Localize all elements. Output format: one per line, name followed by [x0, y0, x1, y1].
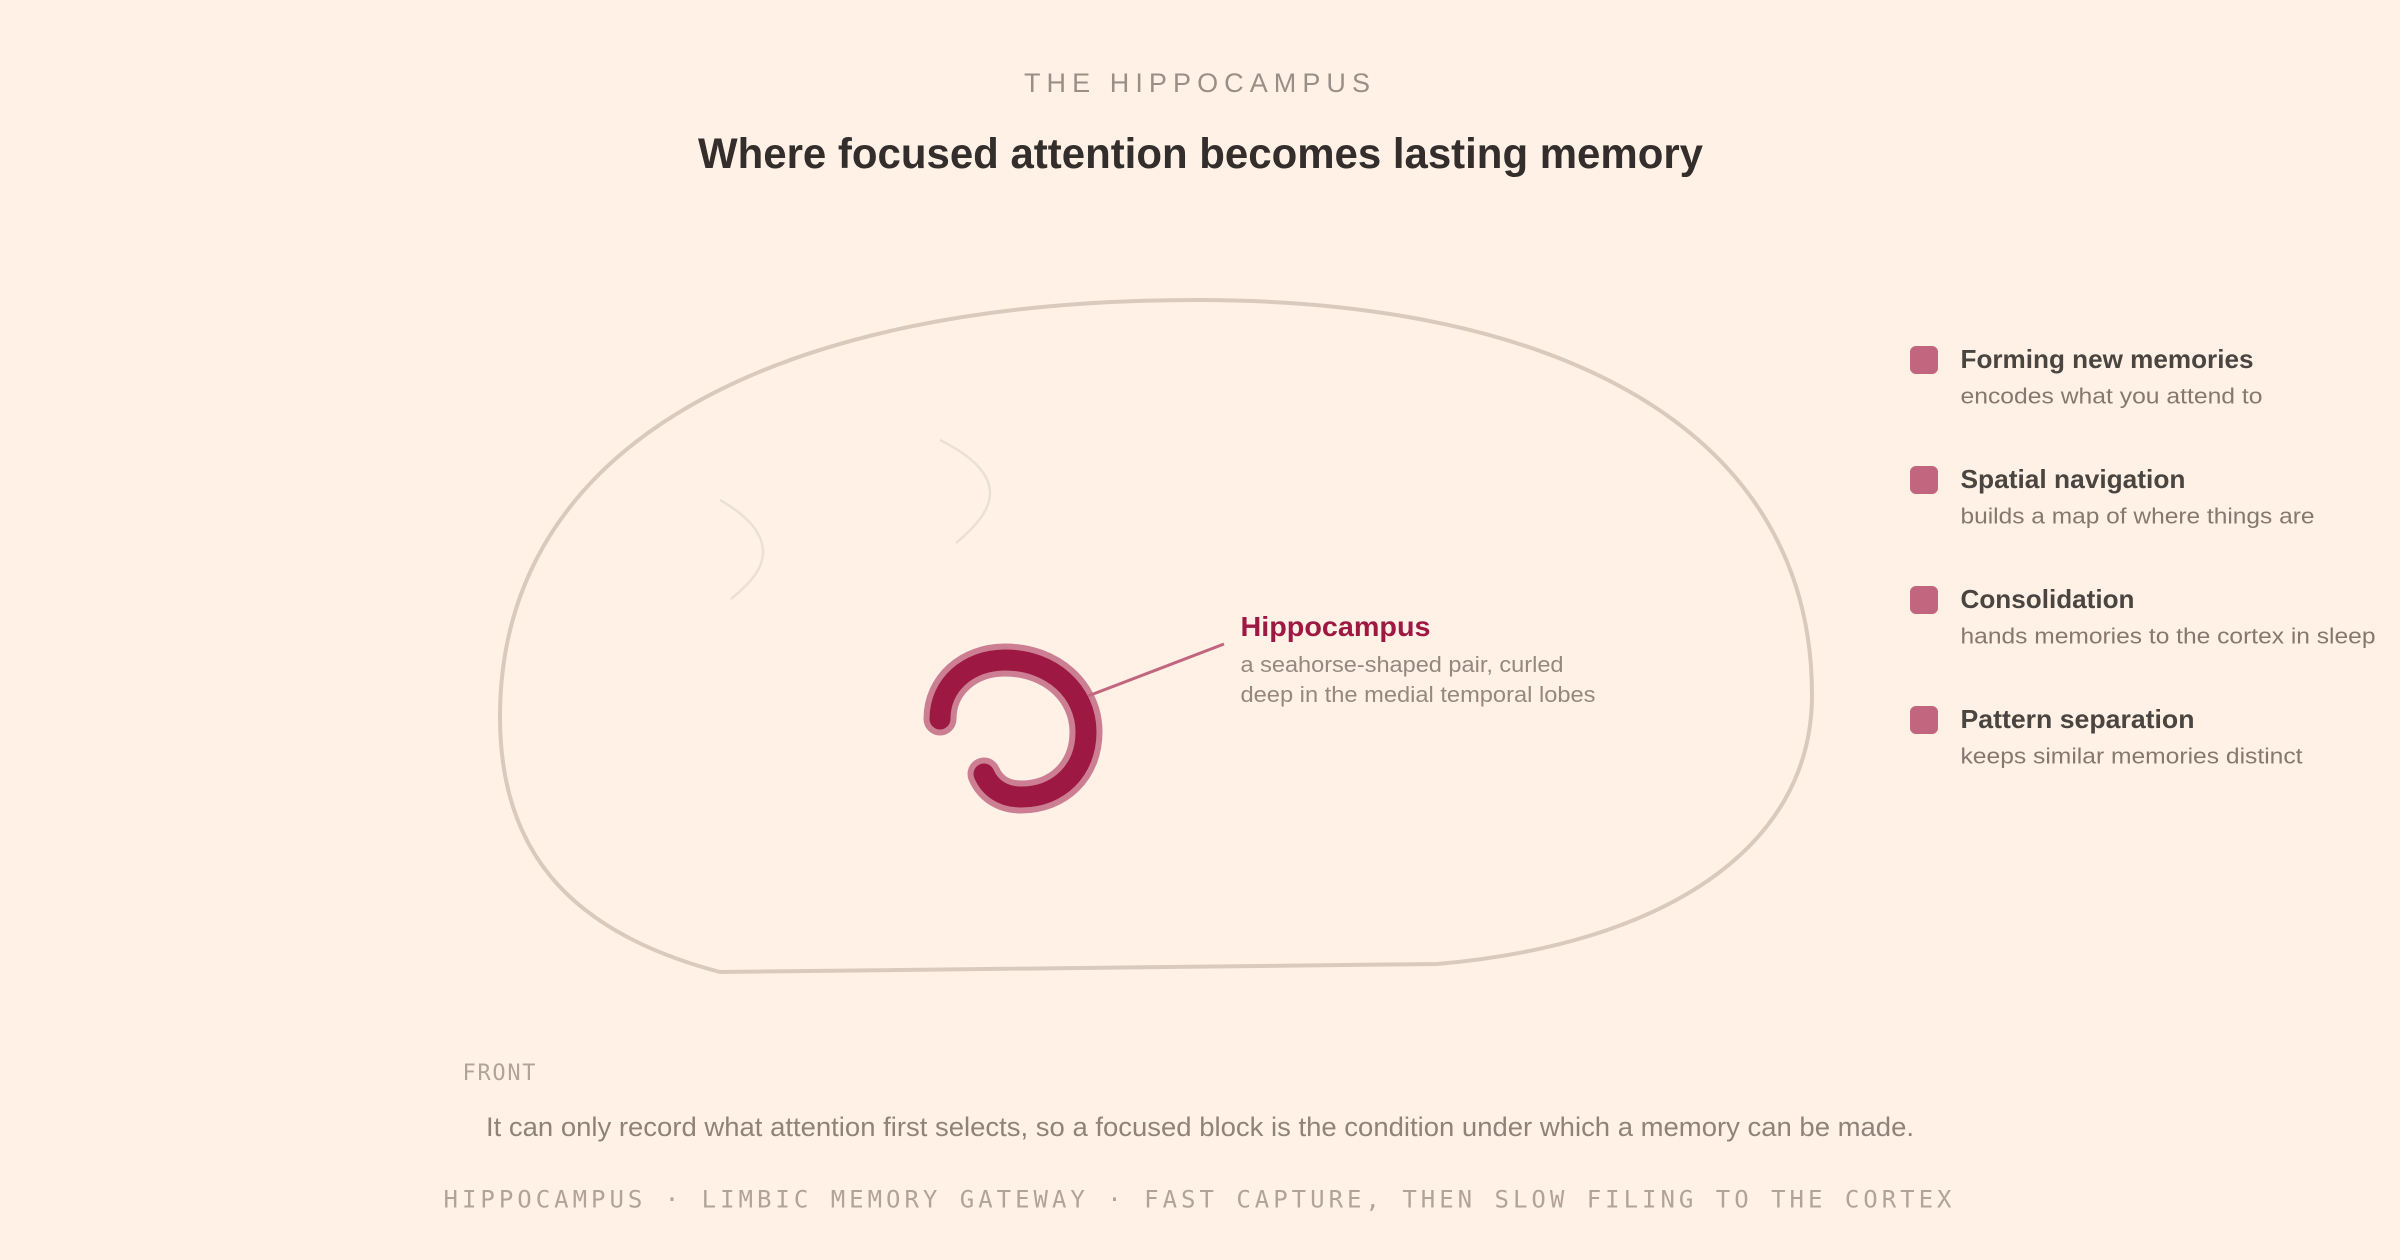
fold left — [720, 500, 763, 599]
brain outline — [500, 300, 1812, 972]
legend item: spatial navigation — [1910, 464, 2314, 528]
legend item: consolidation: Consolidation — [1960, 584, 2134, 614]
callout description: a seahorse-shaped pair, curled — [1240, 652, 1564, 677]
footer line: HIPPOCAMPUS · LIMBIC MEMORY GATEWAY · FAST CAPTURE, THEN SLOW FILING TO THE CORTEX — [444, 1186, 1952, 1214]
callout description: deep in the medial temporal lobes — [1240, 682, 1596, 707]
legend — [1910, 344, 2376, 768]
legend item: pattern separation: keeps similar memories distinct — [1960, 744, 2302, 768]
front orientation label: FRONT — [462, 1061, 536, 1086]
caption sentence: It can only record what attention first selects, so a focused block is the condition under which a memory can be made. — [486, 1112, 1914, 1142]
legend item: consolidation: hands memories to the cortex in sleep — [1960, 624, 2376, 648]
legend item: pattern separation: Pattern separation — [1960, 704, 2194, 734]
legend item: forming new memories: encodes what you attend to — [1960, 384, 2262, 408]
callout heading: Hippocampus — [1240, 611, 1430, 642]
eyebrow heading: THE HIPPOCAMPUS — [1024, 68, 1370, 98]
legend item: forming new memories: Forming new memories — [1960, 344, 2254, 374]
brain diagram — [500, 300, 1812, 972]
callout description — [1240, 652, 1596, 707]
title: Where focused attention becomes lasting memory — [698, 130, 1703, 178]
legend item: pattern separation — [1910, 704, 2302, 768]
hippocampus callout — [1240, 611, 1596, 707]
legend item: forming new memories — [1910, 344, 2262, 408]
legend item: spatial navigation: builds a map of where things are — [1960, 504, 2314, 528]
legend item: spatial navigation: Spatial navigation — [1960, 464, 2186, 494]
fold right — [940, 440, 990, 543]
hippocampus shape — [940, 660, 1086, 797]
leader line — [1088, 644, 1224, 696]
legend item: consolidation — [1910, 584, 2376, 648]
